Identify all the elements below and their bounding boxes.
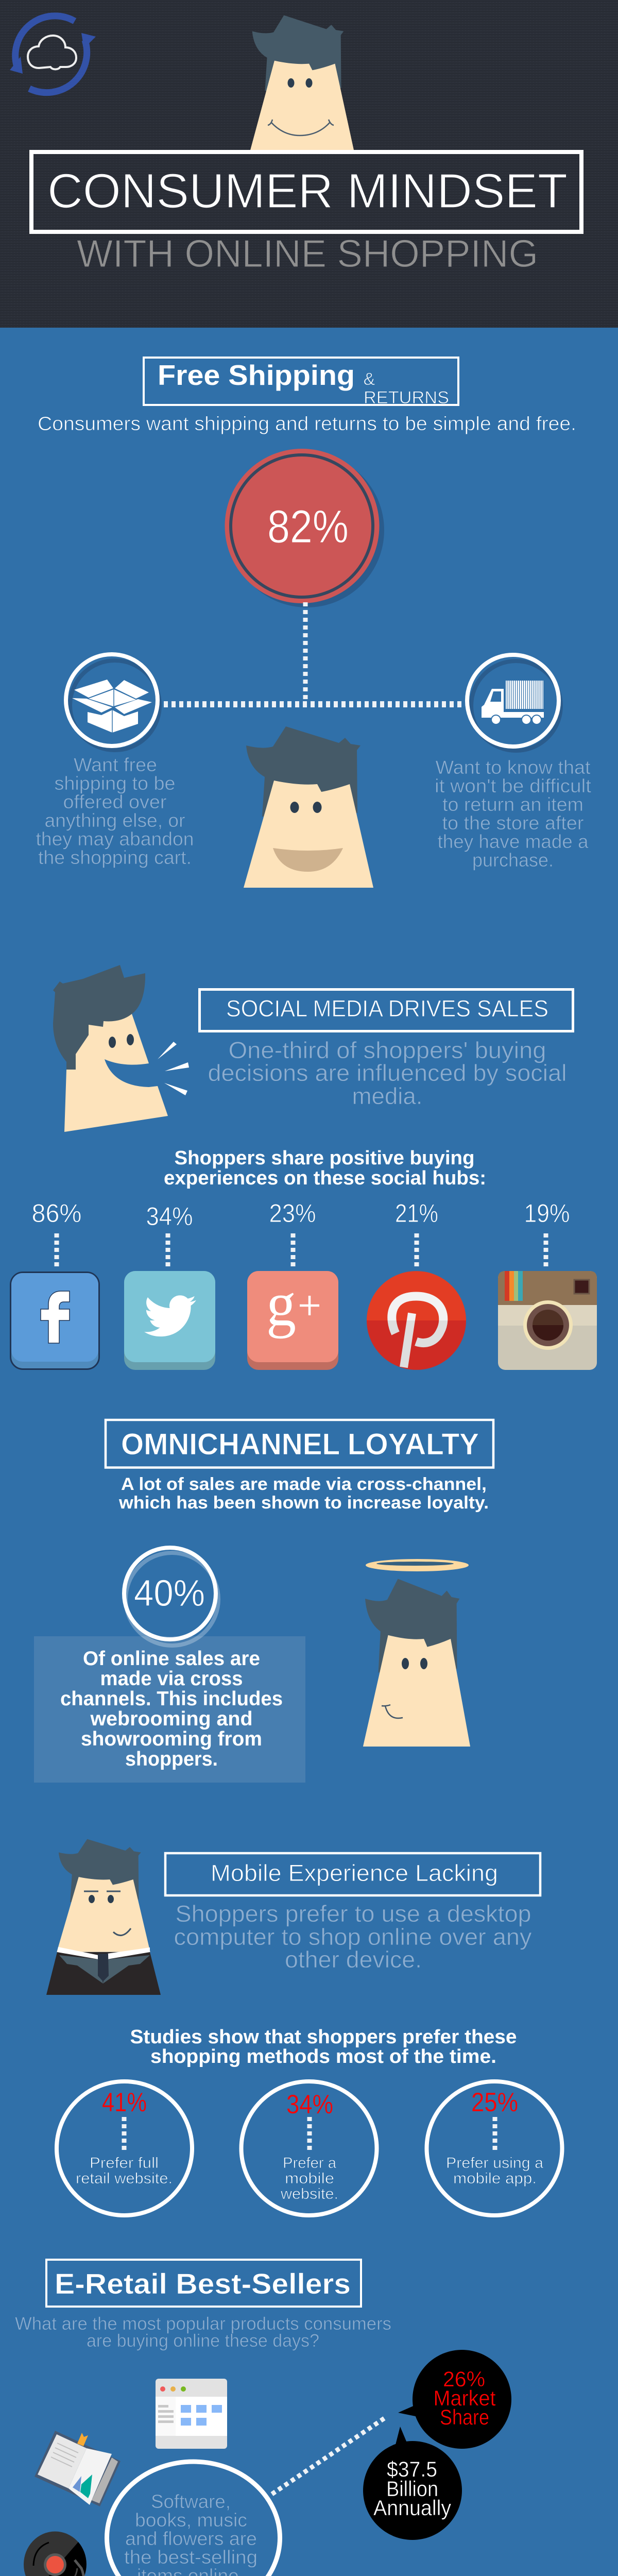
- stat circle: 40%: [124, 1548, 218, 1646]
- stat circle: 82%: 82%: [267, 501, 349, 553]
- heading: returns: RETURNS: [364, 388, 449, 408]
- stat: facebook 86%: 86%: [32, 1199, 81, 1228]
- bubble: 26% market share: 26%: [443, 2367, 485, 2391]
- stat circle: 34% mobile website: 34%: [286, 2090, 333, 2120]
- character: happy head: [244, 726, 373, 888]
- subheading: [118, 1475, 489, 1513]
- bubble: 26% market share: Share: [440, 2405, 489, 2429]
- subheading: Shoppers share positive buying: [174, 1147, 475, 1169]
- stat circle: 25% mobile app: Prefer using a: [446, 2155, 543, 2172]
- stat: google plus 23%: 23%: [269, 1199, 316, 1228]
- heading box: [165, 1853, 540, 1895]
- circle: software books music flowers: books, music: [135, 2510, 247, 2531]
- panel: omnichannel loyalty: [34, 1420, 493, 1783]
- callout text: made via cross: [100, 1668, 243, 1690]
- text: returns note: [435, 757, 592, 871]
- panel: mobile experience: [46, 1839, 562, 2215]
- text: returns note: purchase.: [472, 850, 554, 871]
- icon: truck circle: [467, 655, 561, 751]
- text: free shipping note: the shopping cart.: [38, 847, 192, 868]
- callout text: webrooming and: [90, 1708, 252, 1730]
- dotted connector horizontal: [164, 701, 463, 707]
- character: shouting head: [53, 965, 189, 1132]
- heading: ampersand: &: [364, 369, 375, 389]
- icon: book: [35, 2431, 121, 2506]
- text: free shipping note: they may abandon: [36, 828, 194, 850]
- stat circle: 41% full retail website: Prefer full: [90, 2155, 159, 2172]
- subheading: experiences on these social hubs:: [164, 1167, 486, 1189]
- heading: Mobile Experience Lacking: [211, 1860, 498, 1886]
- circle: software books music flowers: and flowers are: [125, 2528, 257, 2549]
- character: halo head: [363, 1559, 470, 1747]
- icon: facebook: [10, 1273, 99, 1369]
- icon: twitter: [124, 1271, 215, 1370]
- icon: vinyl record: [24, 2532, 90, 2576]
- dotted connector vertical: [303, 602, 308, 701]
- intro text: are buying online these days?: [87, 2331, 319, 2351]
- icon: software window: [156, 2379, 227, 2449]
- icon: google plus: g: [266, 1269, 296, 1339]
- heading box: [106, 1420, 493, 1467]
- stat: pinterest 21%: 21%: [395, 1199, 438, 1228]
- panel: e-retail best-sellers: [15, 2260, 589, 2576]
- body text: decisions are influenced by social: [208, 1060, 566, 1086]
- callout text: showrooming from: [81, 1728, 262, 1750]
- text: returns note: to the store after: [442, 812, 584, 834]
- heading box: [46, 2260, 361, 2307]
- callout panel: [34, 1636, 305, 1783]
- text: free shipping note: shipping to be: [55, 773, 175, 794]
- circle: software books music flowers: the best-selling: [124, 2547, 258, 2568]
- body text: other device.: [285, 1946, 422, 1973]
- heading: free shipping: Free Shipping: [158, 359, 355, 391]
- bubble: $37.5 billion annually: Annually: [373, 2496, 451, 2520]
- bubble: 26% market share: [398, 2350, 511, 2449]
- stat: instagram 19%: [524, 1199, 570, 1268]
- icon: cloud sync logo: [10, 16, 96, 93]
- stat: google plus 23%: [269, 1199, 316, 1268]
- body text: [208, 1037, 566, 1109]
- stat: facebook 86%: [32, 1199, 81, 1268]
- stat: pinterest 21%: [395, 1199, 438, 1268]
- body text: computer to shop online over any: [174, 1924, 532, 1950]
- subheading: Consumers want shipping and returns to be simple and free.: [38, 413, 576, 435]
- intro text: What are the most popular products consumers: [15, 2314, 391, 2334]
- stat circle: 34% mobile website: Prefer a: [283, 2155, 336, 2172]
- subheading: [130, 2026, 517, 2067]
- body text: Shoppers prefer to use a desktop: [175, 1901, 531, 1927]
- heading box: [144, 358, 458, 405]
- character: suited head: [46, 1839, 161, 1995]
- subheading: A lot of sales are made via cross-channel,: [121, 1475, 487, 1494]
- text: returns note: it won't be difficult: [435, 775, 592, 796]
- body text: [174, 1901, 532, 1973]
- stat circle: 41% full retail website: [57, 2081, 192, 2215]
- dotted connector: first to 26%: [272, 2418, 384, 2494]
- body text: One-third of shoppers' buying: [229, 1037, 546, 1063]
- circle: software books music flowers: [107, 2462, 280, 2576]
- stat circle: 25% mobile app: mobile app.: [453, 2170, 537, 2187]
- text: returns note: they have made a: [438, 831, 589, 852]
- panel: header: [0, 0, 618, 328]
- title box: [31, 152, 581, 232]
- stat: instagram 19%: 19%: [524, 1199, 570, 1228]
- body text: media.: [352, 1083, 422, 1109]
- subheading: [164, 1147, 486, 1189]
- icon: google plus: [247, 1269, 338, 1370]
- text: returns note: to return an item: [442, 794, 583, 815]
- character: smiling head: [250, 15, 354, 151]
- intro text: [15, 2314, 391, 2351]
- callout text: Of online sales are: [83, 1648, 260, 1670]
- subheading: Studies show that shoppers prefer these: [130, 2026, 517, 2048]
- stat: twitter 34%: 34%: [146, 1202, 193, 1231]
- stat circle: 34% mobile website: [241, 2081, 377, 2215]
- subheading: which has been shown to increase loyalty.: [118, 1493, 489, 1513]
- text: free shipping note: [36, 754, 194, 868]
- stat circle: 40%: 40%: [134, 1573, 205, 1614]
- bubble: $37.5 billion annually: Billion: [386, 2477, 438, 2501]
- text: free shipping note: anything else, or: [44, 810, 185, 831]
- bubble: $37.5 billion annually: [363, 2427, 462, 2540]
- heading: E-Retail Best-Sellers: [55, 2267, 351, 2300]
- title: CONSUMER MINDSET: [47, 164, 568, 218]
- callout text: channels. This includes: [60, 1688, 283, 1710]
- stat circle: 25% mobile app: [426, 2081, 562, 2215]
- panel: free shipping: [36, 358, 592, 888]
- text: free shipping note: offered over: [63, 791, 167, 812]
- heading box: [200, 989, 573, 1031]
- heading: SOCIAL MEDIA DRIVES SALES: [226, 995, 548, 1022]
- stat circle: 41% full retail website: retail website.: [76, 2170, 173, 2187]
- bubble: $37.5 billion annually: $37.5: [387, 2457, 437, 2481]
- text: returns note: Want to know that: [436, 757, 591, 778]
- heading: OMNICHANNEL LOYALTY: [121, 1428, 479, 1461]
- callout text: shoppers.: [125, 1748, 218, 1770]
- stat circle: 41% full retail website: 41%: [102, 2088, 147, 2117]
- panel: social media: [10, 965, 597, 1370]
- icon: instagram: [498, 1271, 597, 1370]
- subtitle: WITH ONLINE SHOPPING: [77, 232, 538, 275]
- icon: box circle: [66, 654, 160, 750]
- text: free shipping note: Want free: [74, 754, 157, 775]
- stat circle: 82%: [225, 449, 384, 607]
- callout text: [60, 1648, 283, 1770]
- stat circle: 34% mobile website: website.: [280, 2185, 338, 2202]
- stat circle: 25% mobile app: 25%: [471, 2088, 518, 2117]
- subheading: shopping methods most of the time.: [150, 2046, 496, 2067]
- stat circle: 34% mobile website: mobile: [285, 2170, 334, 2187]
- bubble: 26% market share: Market: [434, 2386, 496, 2410]
- icon: pinterest: [367, 1271, 466, 1370]
- circle: software books music flowers: Software,: [151, 2491, 231, 2512]
- stat: twitter 34%: [146, 1202, 193, 1268]
